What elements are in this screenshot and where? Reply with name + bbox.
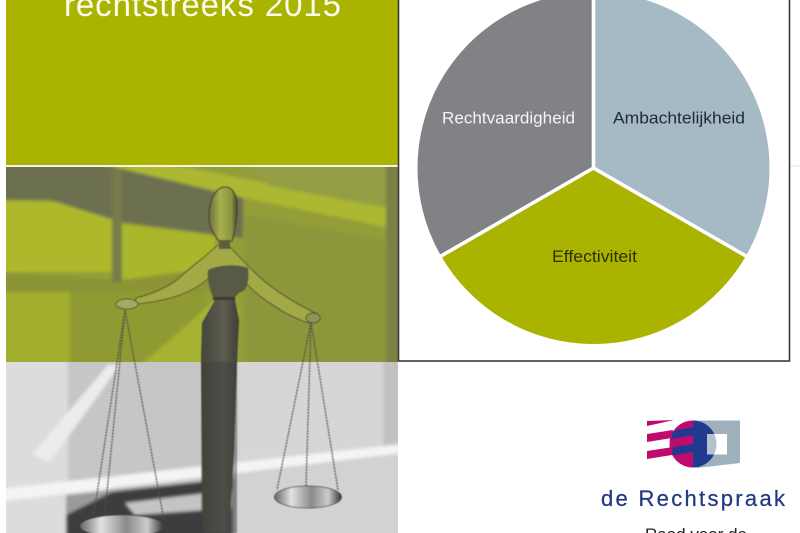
statue hand <box>116 299 138 309</box>
photo background: green-tinted upper part <box>6 167 398 362</box>
right scale pan and chains <box>274 322 342 508</box>
label: Effectiviteit: Effectiviteit <box>552 247 637 266</box>
pie chart <box>418 0 769 344</box>
label: Ambachtelijkheid: Ambachtelijkheid <box>613 108 745 128</box>
logo wordmark: de Rechtspraak <box>601 486 786 511</box>
label: Rechtvaardigheid: Rechtvaardigheid <box>442 108 575 128</box>
pie slice: Effectiviteit <box>441 168 746 344</box>
thin separator line <box>6 165 800 167</box>
statue arms <box>136 245 319 323</box>
statue waist <box>213 297 235 300</box>
statue neck <box>219 240 230 249</box>
statue figure <box>116 187 320 533</box>
left scale pan and chains <box>80 310 164 533</box>
pie slice: Rechtvaardigheid <box>418 0 594 256</box>
logo: de Rechtspraak <box>601 420 786 511</box>
statue right hand <box>306 313 320 323</box>
photo: statue of justice with scales <box>0 155 413 533</box>
photo background: grey lower part <box>0 355 413 533</box>
statue body <box>201 300 239 533</box>
icon: logo mark <box>647 420 740 468</box>
pie slice: Ambachtelijkheid <box>594 0 769 256</box>
statue head <box>209 187 237 241</box>
panel: pie chart frame <box>398 0 790 361</box>
statue bust <box>208 265 249 297</box>
green title panel <box>6 0 398 165</box>
